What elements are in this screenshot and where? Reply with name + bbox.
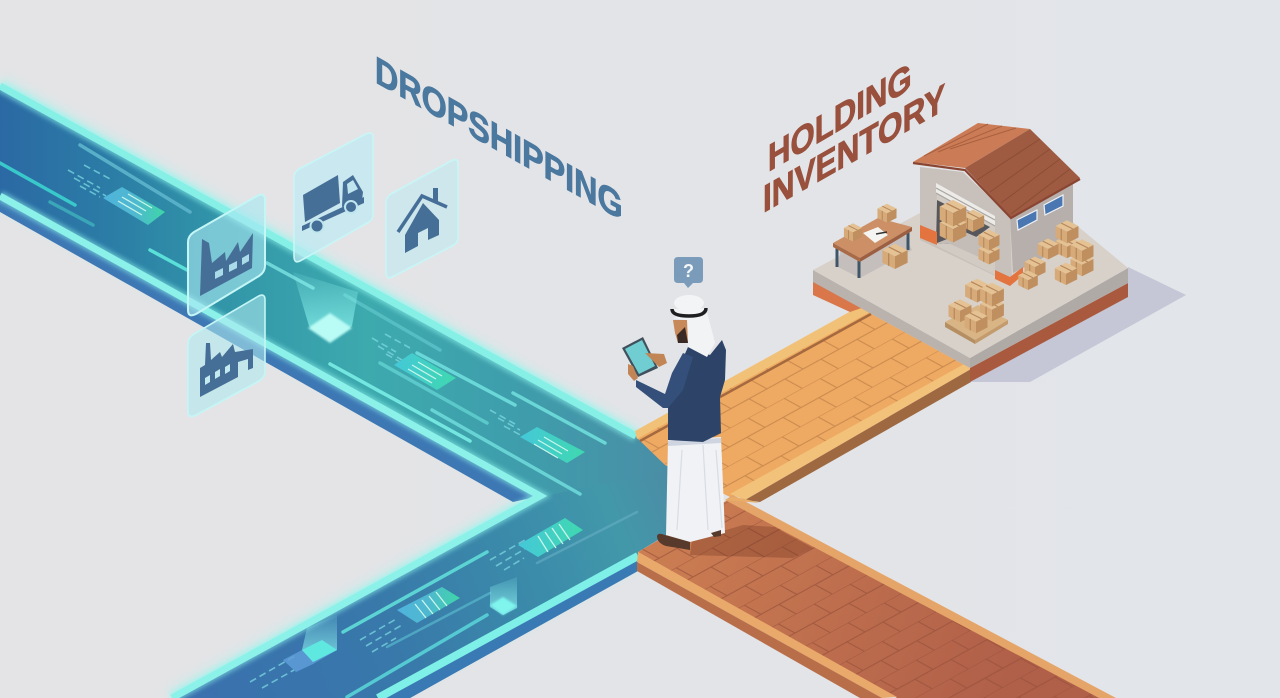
brick pattern (638, 497, 1115, 698)
hologram: lower left (283, 615, 337, 672)
lower arm dark side (384, 558, 638, 698)
hologram: lower right (490, 577, 517, 615)
window (1017, 195, 1063, 230)
icon card: factory small (188, 295, 265, 416)
speech bubble: ? (683, 261, 694, 281)
truck glyph (302, 175, 364, 232)
lower rail (730, 363, 971, 500)
ghutra (672, 312, 715, 357)
box pile right (1018, 220, 1093, 290)
tablet (622, 337, 658, 377)
platform top (813, 213, 1128, 358)
shoes (657, 530, 721, 550)
brick pattern (636, 312, 970, 497)
top rail (635, 306, 870, 439)
thobe (666, 437, 725, 542)
icon card: house (386, 160, 458, 278)
panel: floating icon cards (188, 133, 458, 416)
pallet boxes (945, 279, 1008, 344)
left rail (637, 552, 897, 698)
building (913, 123, 1080, 286)
ground shadow (970, 267, 1186, 382)
brick surface (638, 497, 1115, 698)
arm and sleeve (636, 353, 693, 408)
path outer glow (0, 85, 640, 698)
inner corner glow strip (0, 196, 540, 698)
upper edge glow strip (0, 86, 636, 436)
data card 1 (103, 187, 165, 225)
panel: dropshipping digital path (0, 85, 668, 698)
door opening (935, 192, 995, 275)
lane lines (0, 145, 637, 697)
icon card: delivery truck (294, 133, 373, 262)
boxes at doorway (978, 230, 1000, 264)
title line: holding: HOLDING (768, 53, 912, 180)
desk (833, 204, 912, 278)
agal ring (672, 308, 706, 316)
house glyph (398, 188, 447, 253)
platform side layers (813, 268, 1128, 382)
data dashes (68, 165, 530, 688)
face and beard (673, 320, 688, 343)
title line: inventory: INVENTORY (763, 74, 945, 221)
roof side plane (965, 129, 1080, 217)
title: dropshipping: DROPSHIPPING (375, 48, 623, 229)
boxes inside door (940, 200, 984, 242)
data card 4 (518, 518, 583, 557)
left rail side (637, 562, 882, 698)
side wall (1010, 183, 1073, 273)
roof eaves (913, 163, 1080, 218)
panel: orange brick path to warehouse (635, 306, 971, 502)
factory glyph (200, 233, 253, 296)
lower rail side (745, 369, 971, 502)
jacket (668, 340, 726, 442)
upper arm surface (0, 86, 668, 534)
lower arm surface (176, 470, 668, 698)
hands (628, 353, 667, 381)
panel: red brick path (637, 495, 1116, 698)
upper arm dark side (0, 196, 540, 502)
panel: warehouse (813, 123, 1186, 382)
junction corner (725, 497, 760, 503)
roof gable plane (913, 123, 1030, 168)
person with tablet (622, 257, 726, 550)
hologram: upper (293, 272, 358, 343)
data card 3 (520, 427, 585, 463)
icon card: factory large (188, 195, 265, 315)
factory glyph (200, 343, 253, 397)
data card 2 (394, 353, 456, 390)
speech bubble (674, 257, 703, 288)
lower edge glow strip (378, 556, 638, 698)
orange wall base (920, 225, 937, 245)
title: holding inventory (763, 53, 945, 221)
gable wall (920, 167, 1012, 284)
person shadow (690, 525, 813, 558)
headdress top (674, 295, 704, 311)
brick surface (636, 312, 970, 497)
right rail (725, 495, 1116, 698)
top rail shadow (640, 314, 871, 441)
data card 5 (397, 587, 460, 623)
platform diamond back fill (920, 170, 1128, 310)
